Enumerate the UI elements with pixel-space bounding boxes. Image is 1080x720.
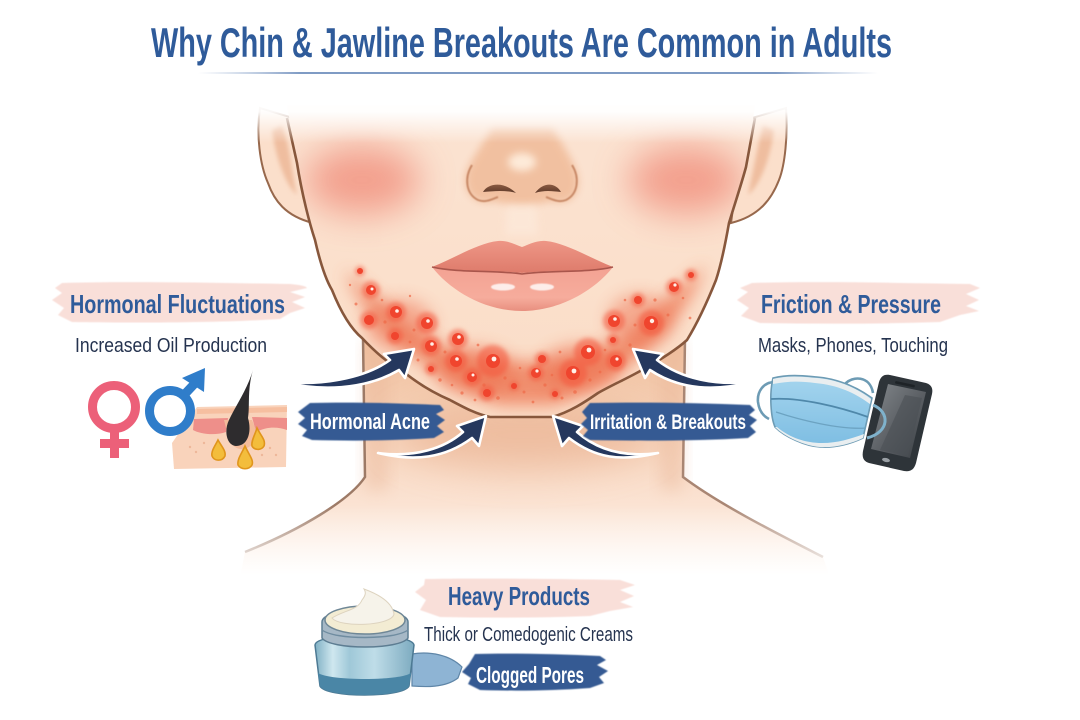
heading brush [415, 579, 635, 618]
panel: friction and pressure [581, 282, 980, 471]
badge: clogged pores [462, 654, 608, 691]
icon: female symbol [92, 386, 136, 458]
heading brush [52, 282, 307, 323]
panel: heavy products [315, 579, 635, 695]
subheading: Masks, Phones, Touching [758, 335, 948, 357]
panel: hormonal fluctuations [52, 282, 445, 469]
arrow: friction to chin upper [633, 349, 757, 388]
redness on chin [345, 265, 705, 405]
heading: Hormonal Fluctuations [70, 289, 285, 319]
arrow: hormonal to chin lower [378, 416, 486, 458]
icon: cream jar [315, 589, 414, 695]
icon: jar lid [412, 653, 462, 687]
subheading: Thick or Comedogenic Creams [424, 624, 633, 646]
icon: skin pore with oil [172, 370, 287, 469]
heading brush [737, 282, 980, 324]
badge: clogged pores: Clogged Pores [476, 662, 584, 688]
icon: surgical mask [758, 376, 885, 447]
fade top and bottom [240, 95, 810, 143]
lips [432, 241, 613, 311]
illustration: face and neck [225, 95, 845, 595]
badge: hormonal acne [298, 403, 445, 441]
badge: irritation and breakouts [581, 403, 757, 441]
face [287, 105, 755, 416]
heading: Heavy Products [448, 581, 590, 611]
badge: hormonal acne: Hormonal Acne [310, 409, 430, 434]
ear: left [258, 108, 313, 223]
badge: irritation and breakouts: Irritation & Breakouts [590, 411, 746, 434]
ear: right [731, 108, 787, 223]
jaw outline [287, 118, 755, 417]
nose [465, 128, 578, 235]
neck [240, 335, 830, 578]
arrow: friction to chin lower [553, 416, 658, 458]
arrow: hormonal to chin upper [278, 349, 414, 388]
subheading: Increased Oil Production [75, 335, 267, 357]
cheek blush [304, 146, 420, 214]
acne spots [349, 266, 697, 403]
icon: phone [863, 375, 932, 471]
heading: Friction & Pressure [761, 289, 941, 319]
icon: male symbol [150, 368, 205, 432]
